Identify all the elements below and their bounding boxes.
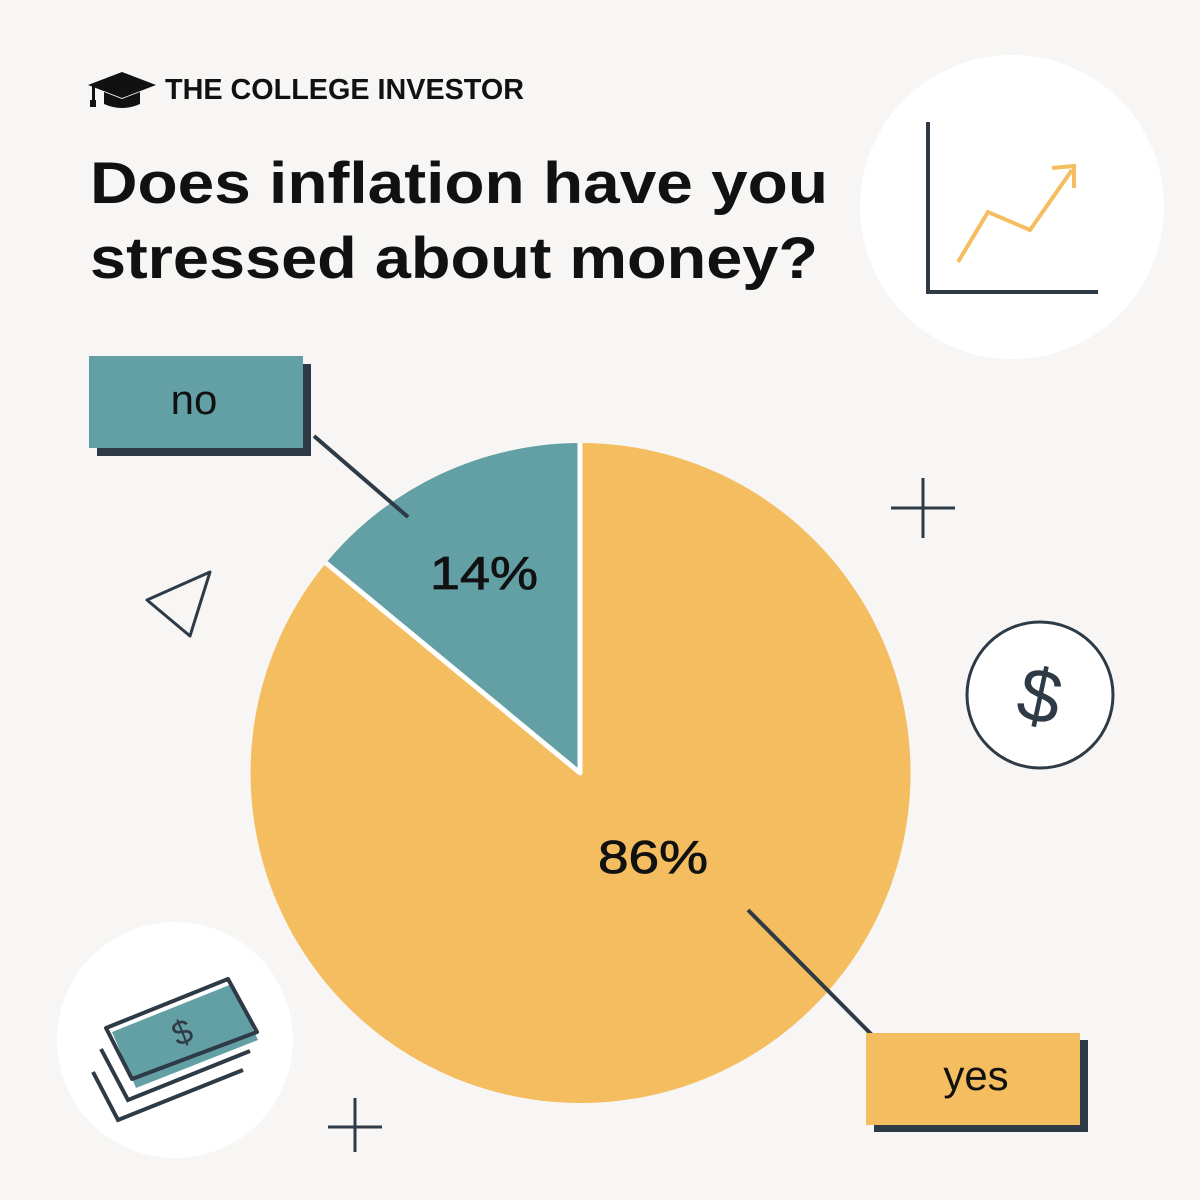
title: Does inflation have you (90, 151, 828, 216)
logo text: THE COLLEGE INVESTOR (165, 74, 524, 106)
pie chart (251, 443, 911, 1103)
logo (88, 72, 524, 108)
icon: money bills (57, 922, 293, 1158)
icon: plus top (891, 478, 955, 538)
callout: no (89, 356, 408, 517)
icon: graduation cap (88, 72, 156, 108)
title: stressed about money? (90, 226, 818, 291)
label 14%: 14% (430, 547, 538, 599)
callout: yes (748, 910, 1088, 1132)
title (90, 151, 828, 291)
icon: plus bottom (328, 1098, 382, 1152)
icon: money bills: $ (166, 1012, 198, 1054)
slice: yes 86% (251, 443, 911, 1103)
icon: triangle (147, 572, 210, 636)
icon: growth chart (860, 55, 1164, 359)
label 86%: 86% (598, 831, 708, 883)
icon: dollar coin: $ (1010, 651, 1069, 742)
callout: no: no (171, 376, 217, 423)
slice: no 14% (326, 443, 580, 773)
callout: yes: yes (943, 1052, 1009, 1099)
icon: dollar coin (967, 622, 1113, 768)
